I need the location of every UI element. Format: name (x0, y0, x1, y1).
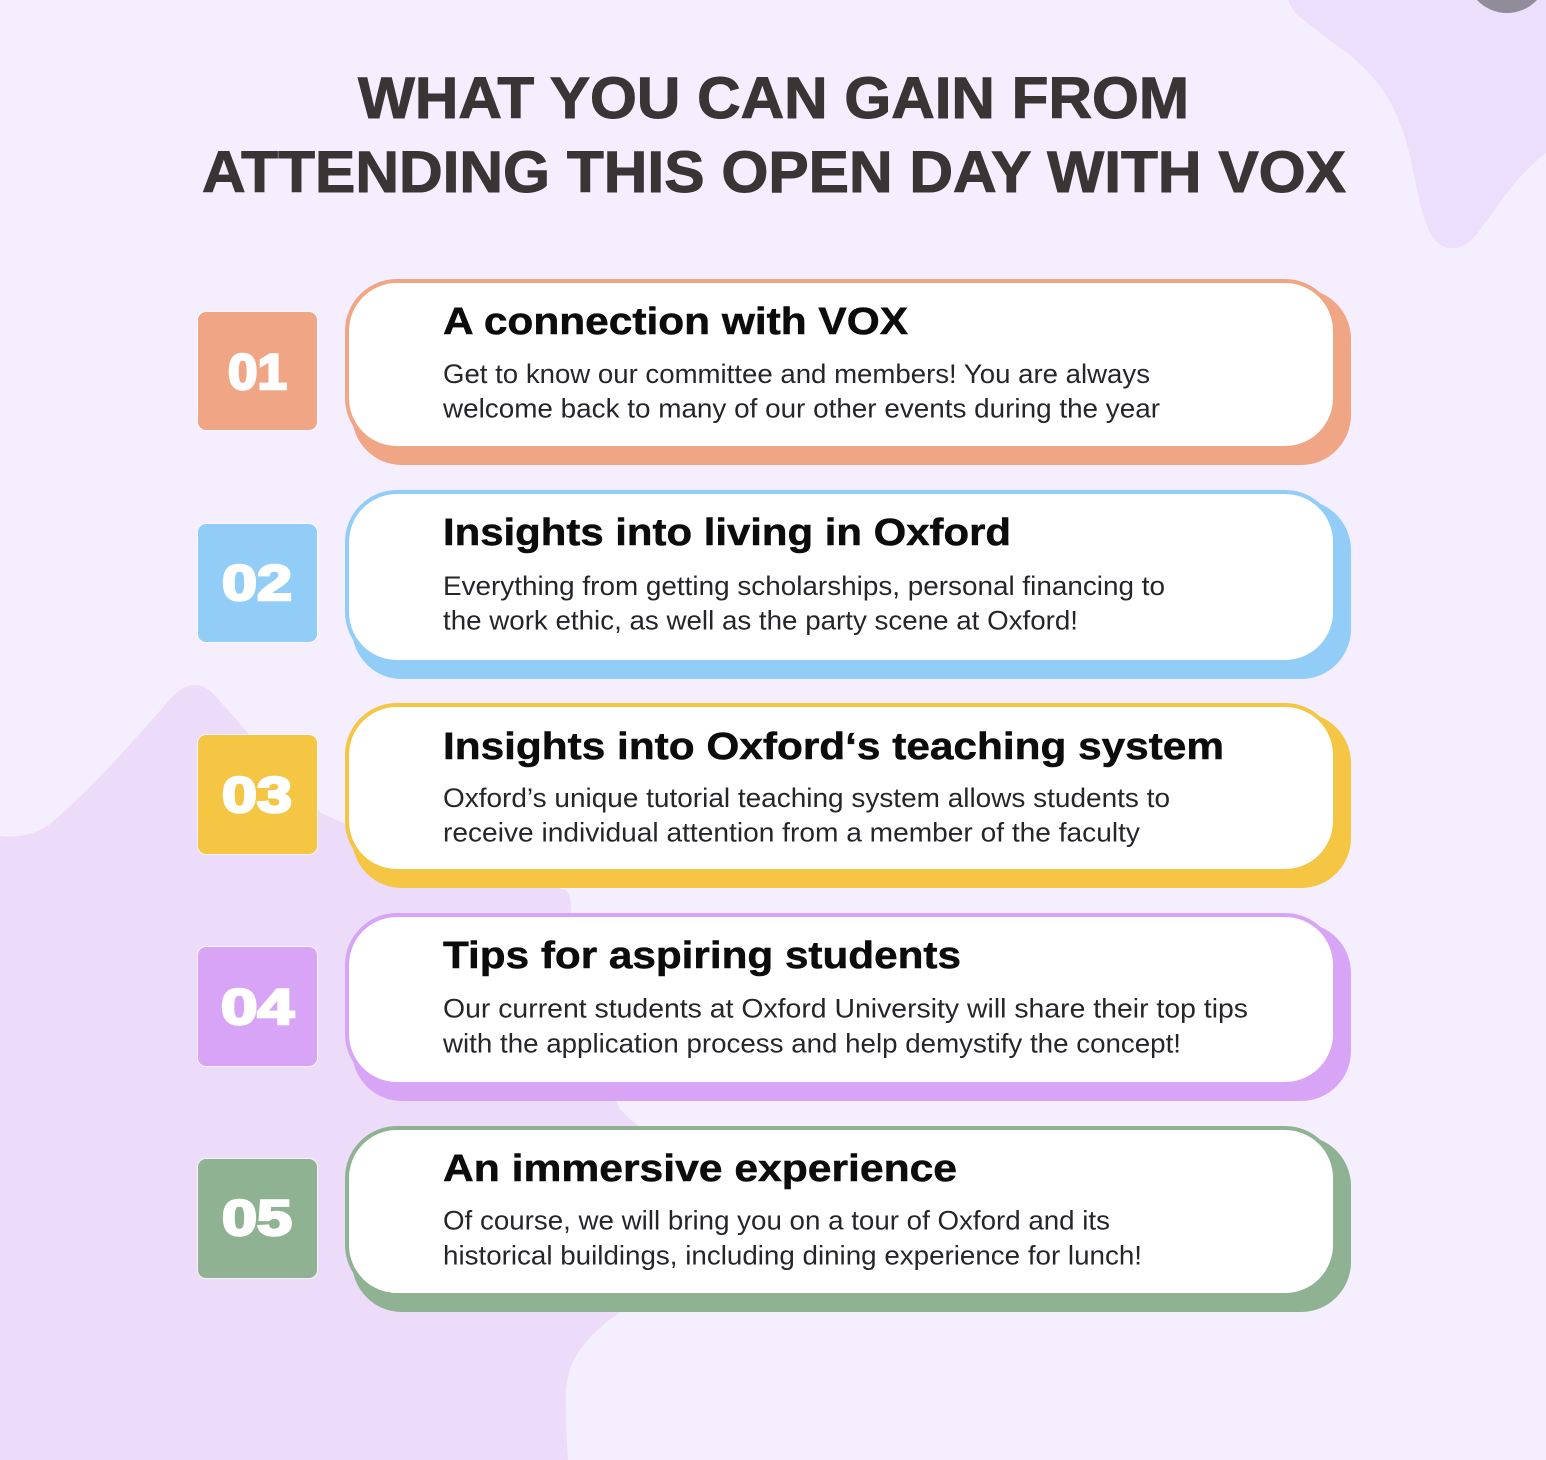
corner avatar circle (1466, 0, 1546, 13)
item 05: An immersive experience (197, 1128, 1351, 1312)
card 04: Tips for aspiring students (443, 935, 961, 977)
card 05: historical buildings, including dining experience for lunch! (443, 1240, 1142, 1270)
title: WHAT YOU CAN GAIN FROM (358, 66, 1189, 131)
card 05: Of course, we will bring you on a tour of Oxford and its (443, 1206, 1110, 1236)
background blob: bottom left (0, 685, 644, 1460)
card 01: welcome back to many of our other events during the year (442, 394, 1160, 424)
card 02 (347, 492, 1351, 679)
card 03 (347, 705, 1351, 888)
card 02: the work ethic, as well as the party scene at Oxford! (443, 606, 1078, 636)
title: ATTENDING THIS OPEN DAY WITH VOX (202, 140, 1346, 205)
number badge 04 (197, 946, 318, 1067)
background blob: top right (1288, 0, 1546, 248)
number badge 03: 03 (222, 767, 292, 823)
number badge 01 (197, 311, 318, 431)
card 02: Everything from getting scholarships, personal financing to (443, 571, 1165, 601)
number badge 04: 04 (221, 979, 294, 1035)
card 01: Get to know our committee and members! You are always (443, 359, 1150, 389)
card 03: receive individual attention from a member of the faculty (443, 818, 1141, 848)
card 03: Oxford’s unique tutorial teaching system allows students to (443, 783, 1170, 813)
number badge 02 (197, 523, 318, 643)
card 05 (347, 1128, 1351, 1312)
number badge 05: 05 (222, 1190, 292, 1246)
title (202, 66, 1346, 205)
number badge 01: 01 (228, 344, 287, 400)
number badge 03 (197, 734, 318, 855)
card 01 (347, 281, 1351, 465)
number badge 02: 02 (222, 555, 292, 611)
card 03: Insights into Oxford‘s teaching system (443, 726, 1224, 768)
card 05: An immersive experience (443, 1148, 957, 1190)
card 04: Our current students at Oxford University will share their top tips (443, 994, 1248, 1024)
item 03: Insights into Oxford's teaching system (197, 705, 1351, 888)
card 04: with the application process and help demystify the concept! (442, 1028, 1181, 1058)
card 04 (347, 915, 1351, 1101)
item 01: A connection with VOX (197, 281, 1351, 465)
item 04: Tips for aspiring students (197, 915, 1351, 1101)
card 02: Insights into living in Oxford (443, 512, 1011, 554)
number badge 05 (197, 1158, 318, 1279)
card 01: A connection with VOX (443, 301, 909, 343)
item 02: Insights into living in Oxford (197, 492, 1351, 679)
